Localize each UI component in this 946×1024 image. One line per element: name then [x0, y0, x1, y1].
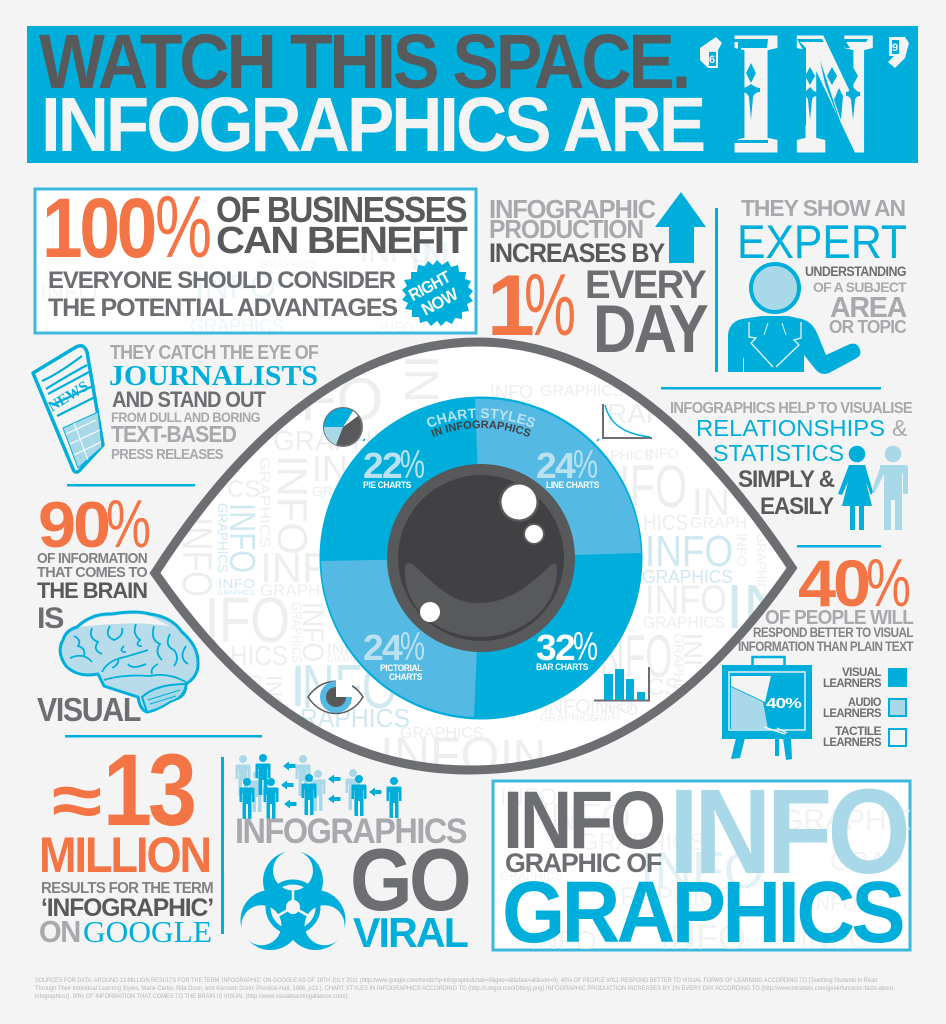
watermark text: IN [410, 235, 450, 279]
watermark text: GRAPHICS [754, 533, 769, 601]
label: bar charts 32 percent: 32 [536, 627, 575, 668]
watermark text [500, 788, 910, 949]
watermark text: GRAPHICS [540, 383, 624, 400]
icon: bar chart [594, 667, 649, 700]
panel: 40 percent [722, 545, 914, 760]
text: increases by: INCREASES BY [489, 238, 665, 268]
watermark text: RAPHICS [620, 881, 736, 911]
stat: approx sign: ≈ [52, 758, 102, 842]
watermark text: RAP [607, 398, 665, 429]
panel: 90 percent visual [37, 486, 198, 728]
text: journalists: JOURNALISTS [109, 361, 318, 392]
text: statistics: STATISTICS [713, 440, 844, 466]
label: line charts 24 percent: 24 [536, 445, 576, 486]
legend: audio learners: AUDIO [848, 695, 881, 709]
watermark text: HICS [230, 640, 288, 671]
stat: 1: 1 [487, 258, 535, 354]
text: infographic in quotes: ‘INFOGRAPHIC’ [41, 894, 213, 922]
quote mark 9: 9 [892, 42, 898, 54]
watermark text: IN [394, 355, 447, 403]
text: of people will: OF PEOPLE WILL [765, 607, 914, 629]
text: day: DAY [593, 291, 708, 367]
divider [65, 735, 262, 738]
label: pictorial charts 24 percent: PICTORIAL [380, 663, 423, 673]
watermark text: HICS [643, 510, 688, 535]
watermark text: GRAPHICS [327, 654, 374, 664]
panel: journalists [33, 342, 319, 472]
legend: visual learners [823, 665, 907, 690]
icon: up arrow [655, 192, 706, 263]
text: they show an: THEY SHOW AN [741, 195, 905, 221]
watermark text [174, 355, 788, 783]
icon: newspaper: NEWS [46, 378, 92, 415]
panel: infographic of infographics [492, 780, 912, 952]
text: and stand out: AND STAND OUT [112, 387, 266, 412]
watermark text: GRAPHICS [190, 316, 284, 336]
watermark text: INFO [296, 602, 329, 662]
stat: percent sign: % [524, 255, 576, 354]
text: ampersand: & [892, 415, 907, 441]
watermark text: GRAP [830, 846, 904, 876]
text: results for the term: RESULTS FOR THE TERM [41, 880, 213, 897]
watermark text [42, 242, 447, 332]
text: information than plain text: INFORMATION THAN PLAIN TEXT [738, 639, 914, 654]
watermark text: INFO [380, 319, 414, 335]
watermark text: GRAPHICS [289, 602, 305, 663]
divider [715, 208, 718, 372]
quote mark 9 [888, 37, 909, 68]
watermark text: INFO [261, 675, 286, 728]
watermark text: INFO [645, 445, 679, 461]
label: bar charts 32 percent: BAR CHARTS [536, 662, 588, 672]
watermark text: IN [692, 482, 730, 524]
watermark text: INFO [800, 922, 872, 955]
text: on: ON [39, 914, 80, 949]
watermark text: NFO [600, 453, 687, 520]
label: pictorial charts 24 percent: CHARTS [389, 672, 422, 682]
text: the brain: THE BRAIN [37, 578, 147, 603]
watermark text: GRAPHICS [780, 804, 937, 837]
watermark text: CS [227, 476, 260, 503]
watermark text: GRAPHICS [540, 712, 597, 724]
watermark text: GRAPHICS [273, 425, 419, 456]
panel: eye with chart styles [150, 338, 798, 774]
watermark text: GRAPHI [671, 633, 687, 687]
text: respond better: RESPOND BETTER TO VISUAL [753, 625, 913, 640]
text block: sources [35, 977, 895, 1000]
watermark text: FO [300, 366, 383, 433]
watermark text: INFO [500, 784, 557, 811]
eye white [155, 342, 792, 770]
legend: tactile learners: LEARNERS [823, 735, 882, 749]
text: press releases: PRESS RELEASES [111, 446, 224, 463]
icon: brain [60, 612, 198, 712]
legend: audio learners [823, 695, 906, 720]
watermark text: GRAPHICS [260, 581, 349, 600]
text: of a subject: OF A SUBJECT [813, 279, 907, 295]
quote mark 6 [700, 37, 722, 68]
legend: audio learners: LEARNERS [823, 706, 882, 720]
watermark text: INFO [174, 517, 221, 597]
watermark text: GRAPHICS [580, 829, 705, 856]
watermark text: GRAPHI [590, 714, 621, 723]
text: area: AREA [830, 292, 907, 324]
label: pie charts 22 percent: % [400, 443, 425, 487]
highlights [420, 482, 545, 622]
watermark text: GRAPHICS [218, 590, 255, 597]
text: the potential advantages: THE POTENTIAL ADVANTAGES [48, 294, 397, 322]
watermark text: GRAPHICS [490, 399, 532, 408]
label: line charts 24 percent: LINE CHARTS [546, 480, 599, 490]
stat: percent sign: % [106, 486, 151, 562]
heading: infographics are: INFOGRAPHICS ARE [41, 82, 704, 168]
stat: 13: 13 [103, 733, 195, 847]
panel: title banner [27, 0, 918, 186]
label: pictorial charts 24 percent: 24 [363, 627, 403, 668]
label: pie charts 22 percent [363, 443, 425, 490]
text: infographics: INFOGRAPHICS [235, 812, 466, 851]
watermark text: IN [312, 448, 348, 489]
decorative word: IN: N [797, 0, 872, 186]
text: easily: EASILY [760, 493, 834, 520]
panel: relationships and statistics [670, 400, 912, 530]
watermark text: GRAPHICS [170, 262, 217, 272]
eye outline [155, 342, 792, 770]
heading: watch this space: WATCH THIS SPACE. [39, 19, 688, 105]
divider [67, 484, 195, 486]
watermark text: INFO [543, 696, 591, 718]
text: go: GO [350, 830, 468, 929]
text: is: IS [37, 602, 63, 635]
watermark text: INFO [660, 917, 746, 958]
divider [221, 757, 224, 934]
watermark text: IN [726, 573, 788, 642]
text: google: GOOGLE [83, 914, 212, 949]
watermark text: GRAPHICS [260, 259, 317, 271]
stat: percent sign: % [866, 545, 911, 621]
label: bar charts 32 percent [536, 625, 598, 672]
watermark text: INFO [590, 697, 633, 717]
badge: right now: NOW [418, 284, 462, 319]
decorative word: IN: I [733, 0, 779, 186]
quote mark 6: 6 [709, 54, 715, 66]
icon: presentation board [722, 657, 812, 760]
watermark text: GRAPHICS [580, 447, 653, 463]
watermark text: INFO [40, 279, 97, 306]
watermark text: INFO [360, 236, 432, 269]
board label: 40% [766, 695, 801, 712]
label: pictorial charts 24 percent [363, 625, 425, 682]
watermark text: INFO [640, 842, 764, 900]
watermark text: INFO [645, 527, 733, 576]
watermark text: INFO [218, 576, 255, 591]
text: info dark: INFO [503, 775, 664, 866]
watermark text: GRAPHICS [400, 725, 484, 742]
icon: pie chart [324, 408, 365, 446]
legend: visual learners: LEARNERS [823, 676, 882, 690]
watermark text: INFO [645, 578, 727, 622]
text: that comes to: THAT COMES TO [37, 564, 148, 581]
legend: tactile learners [823, 724, 906, 749]
icon: newspaper [33, 346, 103, 472]
watermark text: INFO [600, 702, 638, 719]
watermark text: IFO [205, 584, 290, 656]
text: graphics: GRAPHICS [502, 864, 903, 961]
panel: infographics go viral [230, 754, 468, 965]
watermark text: INFO [195, 268, 276, 306]
watermark text: INI [678, 633, 708, 666]
text: of businesses: OF BUSINESSES [216, 189, 467, 230]
watermark text: INFO [260, 544, 360, 591]
text: they catch the eye of: THEY CATCH THE EYE OF [110, 342, 319, 364]
icon: biohazard [240, 851, 346, 950]
pupil [387, 464, 575, 652]
text: can benefit: CAN BENEFIT [216, 220, 468, 262]
chart title: CHART STYLES [426, 408, 536, 428]
icon: small eye [308, 680, 363, 714]
panel: production increases [487, 192, 708, 367]
stat: percent sign: % [155, 177, 212, 276]
watermark text: INFO [222, 503, 263, 573]
chart title: IN INFOGRAPHICS [430, 420, 530, 437]
text: relationships: RELATIONSHIPS [696, 415, 885, 441]
watermark text: INFO [810, 893, 858, 915]
text: simply and: SIMPLY & [738, 466, 835, 493]
text: viral: VIRAL [353, 909, 468, 956]
icon: people sharing [236, 754, 402, 819]
chart title [426, 408, 536, 437]
watermark text: GR [312, 483, 333, 499]
text: everyone should consider: EVERYONE SHOULD CONSIDER [48, 267, 396, 294]
text: text-based: TEXT-BASED [111, 421, 236, 447]
icon: man [872, 446, 908, 530]
icon: businessman [728, 264, 860, 374]
badge: right now: RIGHT [406, 267, 454, 305]
watermark text: INFO [380, 727, 499, 783]
decorative word: IN [732, 0, 872, 186]
watermark text: INFO [490, 382, 533, 402]
stat: 100: 100 [42, 181, 155, 275]
badge: right now [402, 260, 473, 326]
text: from dull and boring: FROM DULL AND BORING [111, 409, 261, 425]
icon: line chart [597, 404, 652, 441]
text: visual: VISUAL [37, 691, 141, 728]
watermark text: I [290, 654, 306, 719]
label: pie charts 22 percent: PIE CHARTS [363, 480, 411, 490]
label: pictorial charts 24 percent: % [400, 625, 425, 669]
text block: sources: infographics/). 90% OF INFORMATION THAT COMES TO THE BRAIN IS VISUAL (http://www.visualteachingalliance.com/). [35, 993, 349, 1000]
watermark text: NFO [302, 653, 397, 722]
text: understanding: UNDERSTANDING [805, 263, 907, 279]
text: infographics help to visualise: INFOGRAPHICS HELP TO VISUALISE [670, 400, 912, 417]
legend: tactile learners: TACTILE [835, 724, 882, 738]
watermark text: GRAPHICS [249, 675, 264, 743]
text: infographic: INFOGRAPHIC [489, 194, 656, 224]
watermark text: RAPHICS [300, 703, 410, 733]
watermark text: INFO [327, 640, 368, 659]
text: production: PRODUCTION [489, 214, 643, 244]
watermark text: GRAPHICS [642, 567, 733, 587]
label: line charts 24 percent [536, 443, 599, 490]
pupil crescent [405, 563, 557, 637]
stat: million: MILLION [39, 827, 210, 883]
label: pie charts 22 percent: 22 [363, 445, 402, 486]
watermark text: GRAPHICS [215, 503, 231, 573]
divider [661, 387, 881, 390]
text: expert: EXPERT [737, 215, 907, 268]
watermark text: NFO [600, 623, 672, 690]
watermark text: GRAPH [690, 515, 747, 532]
label: bar charts 32 percent: % [573, 625, 598, 669]
panel: 13 million [39, 733, 213, 949]
watermark text: GRAPHICS [500, 869, 563, 883]
text: of information: OF INFORMATION [37, 550, 147, 567]
divider [797, 545, 881, 548]
watermark text: GRAPHICS [643, 613, 725, 632]
text: graphic of: GRAPHIC OF [505, 848, 662, 878]
chart: iris donut of chart styles [320, 396, 642, 720]
watermark text: GRAPHICS [256, 457, 273, 548]
stat: 90: 90 [38, 488, 109, 561]
watermark text: IN [500, 730, 546, 782]
watermark text: INFO [530, 925, 597, 956]
icon: woman [838, 446, 873, 530]
stat: 40: 40 [798, 546, 868, 620]
text: or topic: OR TOPIC [829, 317, 907, 337]
watermark text: CS [647, 674, 680, 701]
legend: visual learners: VISUAL [842, 665, 881, 679]
text: every: EVERY [585, 263, 707, 307]
label: line charts 24 percent: % [573, 443, 598, 487]
text: info light: INFO [669, 763, 907, 899]
panel: 100 percent of businesses [35, 177, 476, 336]
watermark text: INFO [734, 533, 750, 567]
watermark text: INFO [540, 797, 631, 839]
watermark text: INFO [269, 455, 316, 555]
panel: expert [728, 195, 907, 374]
